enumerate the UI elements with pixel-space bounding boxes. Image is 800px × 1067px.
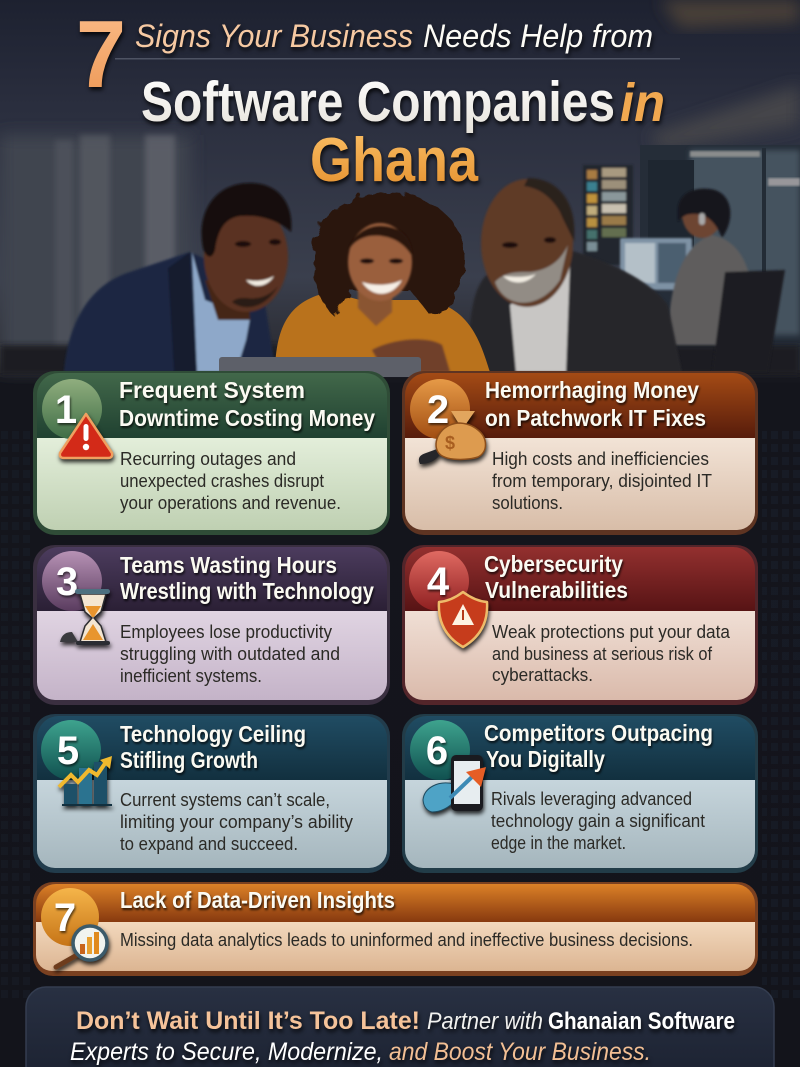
number badge 6: 6	[426, 729, 448, 773]
panel: sign 1	[33, 371, 390, 535]
number badge 5: 5	[57, 729, 79, 773]
heading 3	[120, 552, 374, 604]
title: software companies: Software Companies	[141, 70, 615, 134]
number badge 7	[41, 888, 99, 946]
number badge 2: 2	[427, 388, 449, 432]
description 5: Current systems can’t scale,	[120, 790, 330, 810]
description 6: edge in the market.	[491, 833, 626, 853]
description 3: Employees lose productivity	[120, 622, 332, 642]
title: in: in	[620, 73, 665, 133]
heading 5	[120, 721, 306, 773]
cta: boost line: and Boost Your Business.	[389, 1038, 651, 1066]
heading 4	[484, 551, 628, 603]
description 4	[492, 622, 731, 685]
heading 5: Stifling Growth	[120, 747, 258, 773]
heading 2: Hemorrhaging Money	[485, 377, 699, 403]
panel: sign 3	[33, 545, 390, 705]
cta: partner with: Partner with	[427, 1008, 543, 1035]
description 2	[492, 449, 712, 513]
title: needs help from: Needs Help from	[423, 18, 653, 54]
heading 1: Downtime Costing Money	[119, 405, 375, 431]
heading 6: Competitors Outpacing	[484, 720, 713, 746]
panel: sign 5	[33, 714, 390, 873]
heading 3: Wrestling with Technology	[120, 578, 374, 604]
laptop	[219, 357, 421, 377]
panel: sign 7	[33, 882, 758, 976]
description 2: solutions.	[492, 493, 563, 513]
panel: sign 2	[402, 371, 758, 535]
title: signs your business: Signs Your Business	[135, 18, 413, 54]
description 6: Rivals leveraging advanced	[491, 789, 692, 809]
panel: sign 4	[402, 545, 758, 705]
description 6	[491, 789, 705, 853]
title: ghana: Ghana	[310, 126, 478, 195]
description 2: from temporary, disjointed IT	[492, 471, 712, 491]
icon: magnifier with chart	[56, 926, 107, 967]
heading 1: Frequent System	[119, 377, 305, 403]
description 4: Weak protections put your data	[492, 622, 731, 642]
heading 2: on Patchwork IT Fixes	[485, 405, 706, 431]
heading 3: Teams Wasting Hours	[120, 552, 337, 578]
description 3	[120, 622, 340, 686]
panel: sign 6	[402, 714, 758, 873]
icon: phone with arrow	[423, 755, 486, 812]
description 5	[120, 790, 353, 854]
description 1: unexpected crashes disrupt	[120, 471, 324, 491]
icon: money bag	[419, 411, 486, 464]
heading 6	[484, 720, 713, 772]
description 4: cyberattacks.	[492, 665, 593, 685]
heading 2	[485, 377, 706, 431]
description 1: Recurring outages and	[120, 449, 296, 469]
description 3: struggling with outdated and	[120, 644, 340, 664]
title	[76, 1, 665, 195]
heading 4: Cybersecurity	[484, 551, 623, 577]
description 7: Missing data analytics leads to uninformed and ineffective business decisions.	[120, 930, 693, 950]
panel: call to action	[26, 987, 774, 1067]
description 5: to expand and succeed.	[120, 834, 298, 854]
description 5: limiting your company’s ability	[120, 812, 353, 832]
title: big 7: 7	[76, 1, 126, 108]
description 6: technology gain a significant	[491, 811, 705, 831]
number badge 6	[410, 720, 470, 780]
number badge 3	[42, 551, 102, 611]
number badge 4: 4	[427, 560, 450, 604]
people: woman in mustard shirt	[275, 193, 490, 372]
description 3: inefficient systems.	[120, 666, 262, 686]
icon: growth chart	[59, 756, 112, 806]
number badge 1: 1	[55, 388, 77, 432]
cta: ghanaian software: Ghanaian Software	[548, 1008, 735, 1035]
colored shelf in background	[583, 165, 633, 265]
description 2: High costs and inefficiencies	[492, 449, 709, 469]
heading 4: Vulnerabilities	[485, 577, 628, 603]
heading 1	[119, 377, 375, 431]
cta: experts line: Experts to Secure, Modernize,	[70, 1038, 383, 1066]
icon: shield	[439, 592, 487, 647]
number badge 1	[42, 379, 102, 439]
people: man in navy suit	[64, 183, 291, 372]
heading 7: Lack of Data-Driven Insights	[120, 887, 395, 913]
icon: money bag: $	[445, 433, 455, 453]
description 1	[120, 449, 341, 513]
description 1: your operations and revenue.	[120, 493, 341, 513]
number badge 4	[409, 551, 469, 611]
number badge 7: 7	[54, 896, 76, 940]
icon: hourglass	[60, 589, 110, 645]
number badge 3: 3	[56, 560, 78, 604]
description 4: and business at serious risk of	[492, 644, 713, 664]
number badge 5	[41, 720, 101, 780]
people: man in grey suit with beard	[469, 178, 682, 372]
background worker with headset, monitor and chair	[620, 189, 785, 372]
heading 5: Technology Ceiling	[120, 721, 306, 747]
icon: warning triangle	[60, 414, 112, 458]
cta: don't wait: Don’t Wait Until It’s Too Late!	[76, 1007, 420, 1035]
heading 6: You Digitally	[486, 746, 605, 772]
number badge 2	[410, 379, 470, 439]
